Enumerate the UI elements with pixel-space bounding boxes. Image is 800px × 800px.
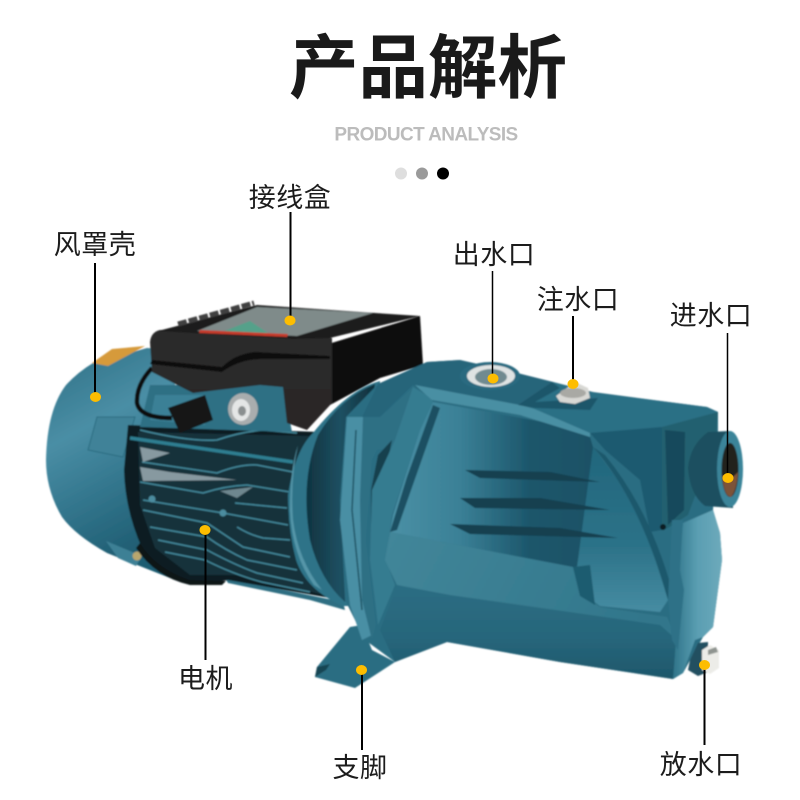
lower recess <box>380 585 677 679</box>
rear fan cover <box>46 346 175 578</box>
body top highlight <box>415 385 590 437</box>
inlet port <box>688 431 743 508</box>
side of end block <box>590 427 662 532</box>
warning label <box>92 346 145 366</box>
front of end block <box>662 412 718 530</box>
silver nut <box>228 393 258 425</box>
box top <box>158 305 420 339</box>
mounting foot <box>315 625 395 688</box>
dark strip <box>371 440 392 540</box>
drain plug <box>688 642 719 676</box>
callout: 注水口 <box>537 285 619 389</box>
priming port <box>518 382 598 410</box>
callout: 电机 <box>178 525 233 694</box>
box side <box>325 316 423 405</box>
callout: 进水口: 进水口 <box>670 301 752 331</box>
box front <box>150 330 332 430</box>
motor flange <box>288 381 380 606</box>
box seam <box>150 352 330 372</box>
callout: 接线盒: 接线盒 <box>249 183 331 213</box>
callout: 支脚 <box>332 665 388 783</box>
body ribs <box>465 470 600 482</box>
outlet port <box>460 362 520 390</box>
motor strip <box>225 578 345 610</box>
terminal box bracket <box>137 368 292 433</box>
callout: 风罩壳 <box>54 230 136 402</box>
motor fins <box>124 425 330 598</box>
callout: 出水口 <box>453 240 535 384</box>
callout: 放水口 <box>660 660 742 780</box>
callout: 出水口: 出水口 <box>453 240 535 270</box>
callout: 进水口 <box>670 301 752 483</box>
pump body <box>340 360 722 679</box>
top slope of end block <box>530 382 718 433</box>
subtitle: PRODUCT ANALYSIS <box>334 124 518 146</box>
upper dome <box>362 360 553 417</box>
cable and gland <box>137 368 213 433</box>
lower band <box>385 532 677 640</box>
callout: 放水口: 放水口 <box>660 750 742 780</box>
terminal box <box>150 303 423 430</box>
pump illustration <box>46 303 743 688</box>
upper left of body <box>370 387 433 625</box>
callout: 支脚: 支脚 <box>332 753 388 783</box>
callout: 电机: 电机 <box>178 664 233 694</box>
callout: 注水口: 注水口 <box>537 285 619 315</box>
front ring <box>340 417 372 640</box>
callout: 风罩壳: 风罩壳 <box>54 230 136 260</box>
pagination dots <box>395 168 449 180</box>
callout: 接线盒 <box>249 183 331 326</box>
main panel <box>390 402 623 567</box>
lower end cover <box>673 510 722 679</box>
title: 产品解析 <box>289 29 567 107</box>
